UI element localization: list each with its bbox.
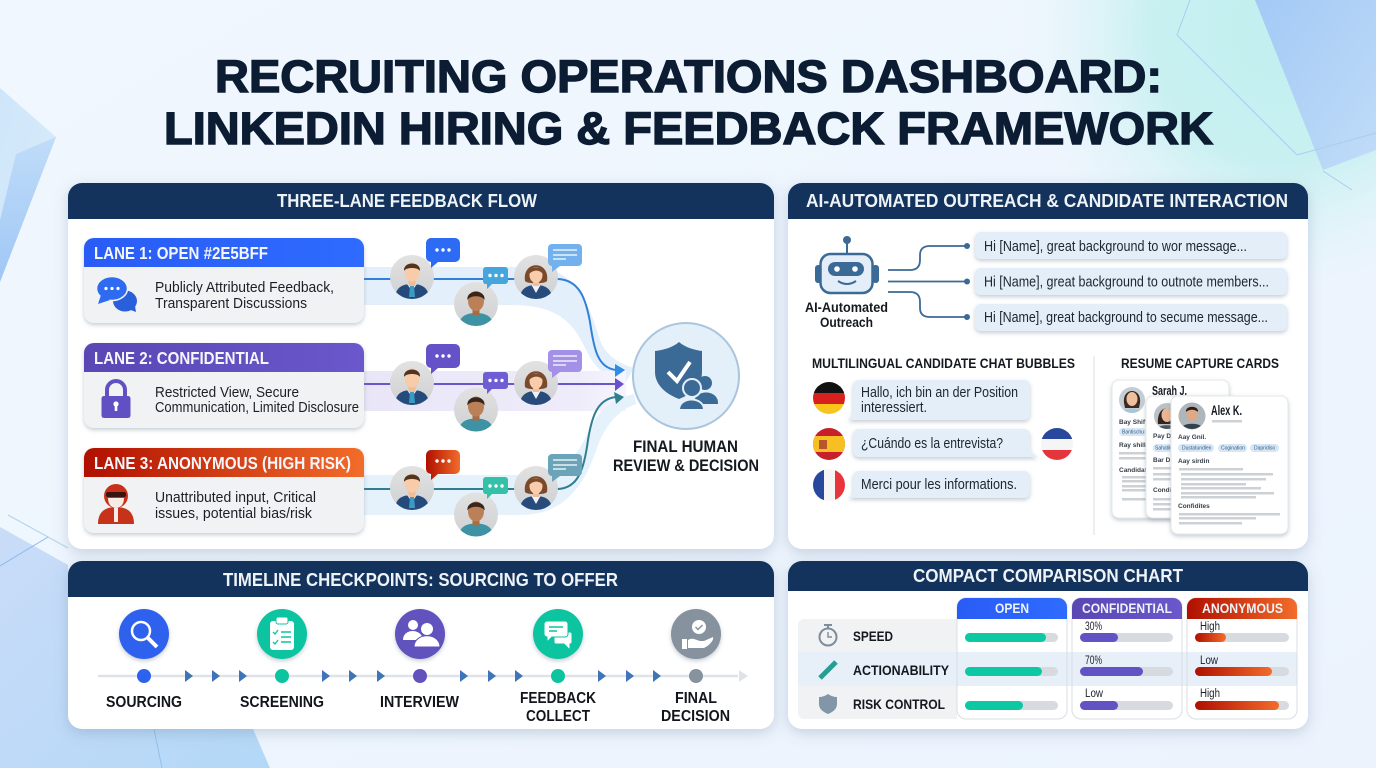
chat row: German: [813, 380, 1030, 420]
outreach message 1: [975, 232, 1287, 259]
icon: final review shield with people: [633, 323, 739, 429]
row: actionability: ACTIONABILITY: [853, 662, 950, 678]
speech bubble: [426, 238, 460, 268]
resume card: Sarah: Bay Shift: [1119, 419, 1148, 426]
resume card: Sarah: Ray shills: [1119, 442, 1150, 449]
lane 2 participants: [390, 344, 582, 432]
resume card: Sarah: Sarah J.: [1152, 384, 1187, 398]
avatar: Sarah: [1119, 387, 1145, 413]
speech bubble: [426, 450, 460, 480]
checkpoint: final decision: FINAL: [675, 690, 717, 707]
column: open: [957, 598, 1067, 719]
resume card: Alex: Dustatundlen: [1182, 446, 1212, 452]
lane 1 description: Publicly Attributed Feedback,: [155, 279, 334, 296]
resume card: middle: Condid: [1153, 487, 1175, 494]
icon: padlock: [102, 381, 130, 418]
lane 3 participants: [390, 450, 582, 536]
lane 1 description: Transparent Discussions: [155, 295, 307, 312]
row: speed: [798, 619, 957, 652]
icon: anonymous hooded figure: [98, 484, 134, 524]
flow band: lane 3: [364, 394, 636, 515]
lane 3 description: [155, 489, 316, 522]
column: open: OPEN: [995, 600, 1029, 616]
final review label: [613, 437, 759, 475]
panel header: comparison chart: COMPACT COMPARISON CHART: [913, 566, 1183, 586]
speech bubble: [483, 477, 508, 499]
resume card: Sarah: Bantischu: [1122, 430, 1144, 436]
lane 1 card: LANE 1: OPEN #2E5BFF: [94, 243, 268, 263]
arrow: lane 3: [614, 392, 624, 404]
chat row: German: interessiert.: [861, 400, 927, 416]
robot label: Outreach: [820, 315, 873, 330]
lane 3 card: [84, 448, 364, 533]
chat row: Spanish: ¿Cuándo es la entrevista?: [861, 436, 1003, 452]
subheading: chat bubbles: MULTILINGUAL CANDIDATE CHAT BUBBLES: [812, 356, 1075, 371]
arrow: lane 1: [615, 364, 625, 377]
checkpoint: feedback collect: COLLECT: [526, 708, 590, 725]
lane 2 card: [84, 343, 364, 428]
speech bubble: [483, 372, 508, 394]
resume card: Alex: Dapridiso: [1254, 446, 1275, 452]
chat row: German: Hallo, ich bin an der Position: [861, 385, 1018, 401]
outreach message 3: Hi [Name], great background to secume message...: [984, 310, 1268, 326]
outreach message 3: [975, 304, 1287, 331]
checkpoint: sourcing: SOURCING: [106, 694, 182, 711]
panel: timeline checkpoints: [68, 561, 774, 729]
lane 1 participants: [390, 238, 582, 326]
panel header: AI outreach: AI-AUTOMATED OUTREACH & CANDIDATE INTERACTION: [806, 191, 1288, 211]
checkpoint: feedback collect: FEEDBACK: [520, 690, 596, 707]
lane 2 description: Restricted View, Secure: [155, 384, 299, 401]
lane 3 description: Unattributed input, Critical: [155, 489, 316, 506]
icon: pencil: [820, 662, 836, 678]
panel header: comparison chart: [788, 561, 1308, 591]
chat row: Spanish: [813, 428, 1073, 461]
resume card: Alex: Aay Gnil.: [1178, 434, 1206, 441]
note bubble: [548, 244, 582, 272]
note bubble: [548, 350, 582, 378]
outreach message 2: Hi [Name], great background to outnote members...: [984, 274, 1269, 290]
panel header: AI outreach: [788, 183, 1308, 219]
resume card: Alex: [1171, 396, 1288, 534]
checkpoint: interview: [380, 609, 460, 711]
column: anonymous: High: [1200, 621, 1220, 633]
icon: magnifier: [132, 622, 157, 647]
icon: chat cards: [544, 621, 572, 650]
row: risk control: RISK CONTROL: [853, 696, 945, 712]
panel: compact comparison chart: [788, 561, 1308, 729]
robot label: AI-Automated: [805, 300, 888, 315]
column: confidential: [1072, 598, 1182, 719]
icon: robot: [815, 236, 879, 293]
icon: French flag: [813, 469, 846, 501]
lane 1 card: [84, 238, 364, 323]
chat row: French: [813, 469, 1030, 501]
timeline track: [98, 670, 748, 682]
title: LINKEDIN HIRING & FEEDBACK FRAMEWORK: [164, 103, 1214, 154]
resume card: middle: [1144, 396, 1176, 522]
row: actionability: [798, 652, 1297, 686]
connectors: robot to messages: [888, 243, 970, 320]
flow band: lane 1: [364, 267, 634, 382]
resume card: middle: Bar DDS: [1153, 457, 1180, 464]
outreach message 1: Hi [Name], great background to wor message...: [984, 239, 1247, 255]
flow line: lane 3: [364, 397, 616, 489]
lane 3 description: issues, potential bias/risk: [155, 505, 312, 522]
note bubble: [548, 454, 582, 482]
column: confidential: 30%: [1085, 621, 1102, 633]
resume card: Alex: Alex K.: [1211, 403, 1242, 418]
speech bubble: [426, 344, 460, 374]
checkpoint: sourcing: [106, 609, 182, 711]
flow band: lane 2: [364, 371, 626, 411]
resume card: Sarah: [1112, 380, 1229, 518]
icon: German flag: [813, 382, 845, 415]
row: risk control: [798, 686, 957, 719]
checkpoint: final decision: DECISION: [661, 708, 730, 725]
outreach message 2: [975, 268, 1287, 295]
checkpoint: screening: SCREENING: [240, 694, 324, 711]
resume card: middle: Sahatik: [1155, 446, 1172, 452]
lane 3 card: LANE 3: ANONYMOUS (HIGH RISK): [94, 453, 351, 473]
column: anonymous: ANONYMOUS: [1202, 600, 1283, 616]
lane 2 description: [155, 384, 359, 416]
icon: stopwatch: [820, 625, 836, 646]
avatar: Alex: [1178, 402, 1206, 430]
lane 2 card: LANE 2: CONFIDENTIAL: [94, 348, 269, 368]
resume card: middle: Pay Dirt: [1153, 433, 1178, 440]
column: anonymous: High: [1200, 688, 1220, 700]
flow line: lane 1: [364, 279, 616, 370]
final review label: FINAL HUMAN: [633, 437, 738, 456]
resume card: Sarah: Candidates: [1119, 467, 1154, 474]
avatar: middle candidate: [1154, 403, 1170, 429]
icon: shield: [819, 694, 837, 714]
panel header: timeline: TIMELINE CHECKPOINTS: SOURCING TO OFFER: [223, 570, 618, 590]
checkpoint: feedback collect: [520, 609, 596, 725]
row: speed: SPEED: [853, 628, 893, 644]
icon: clipboard: [270, 617, 294, 650]
column: confidential: 70%: [1085, 655, 1102, 667]
checkpoint: screening: [240, 609, 324, 711]
arrow: lane 2: [615, 378, 624, 391]
speech bubble: [483, 267, 508, 289]
lane 2 description: Communication, Limited Disclosure: [155, 399, 359, 416]
icon: hand with check: [682, 620, 713, 649]
icon: people: [403, 620, 440, 647]
icon: tricolour flag: [1041, 428, 1073, 461]
column: anonymous: [1187, 598, 1297, 719]
panel header: three-lane feedback flow: THREE-LANE FEEDBACK FLOW: [277, 191, 537, 211]
lane 1 description: [155, 279, 334, 312]
resume card: Alex: Cogination: [1221, 446, 1245, 452]
title: RECRUITING OPERATIONS DASHBOARD:: [215, 51, 1162, 102]
column: confidential: Low: [1085, 688, 1104, 700]
resume card: Alex: Confidites: [1178, 503, 1210, 510]
robot label: [805, 300, 888, 330]
resume card: Alex: Aay sirdin: [1178, 458, 1209, 465]
icon: Spanish flag: [813, 428, 845, 460]
title: [164, 51, 1214, 154]
panel header: timeline: [68, 561, 774, 597]
checkpoint: interview: INTERVIEW: [380, 694, 460, 711]
chat row: French: Merci pour les informations.: [861, 477, 1017, 493]
subheading: resume cards: RESUME CAPTURE CARDS: [1121, 356, 1279, 371]
checkpoint: final decision: [661, 609, 730, 725]
column: confidential: CONFIDENTIAL: [1082, 600, 1172, 616]
column: anonymous: Low: [1200, 655, 1219, 667]
panel: three-lane feedback flow: [68, 183, 774, 549]
panel: AI outreach and candidate interaction: [788, 183, 1308, 549]
icon: chat bubbles: [96, 276, 137, 312]
final review label: REVIEW & DECISION: [613, 456, 759, 475]
flow line: lane 2: [364, 383, 616, 385]
panel header: three-lane feedback flow: [68, 183, 774, 219]
